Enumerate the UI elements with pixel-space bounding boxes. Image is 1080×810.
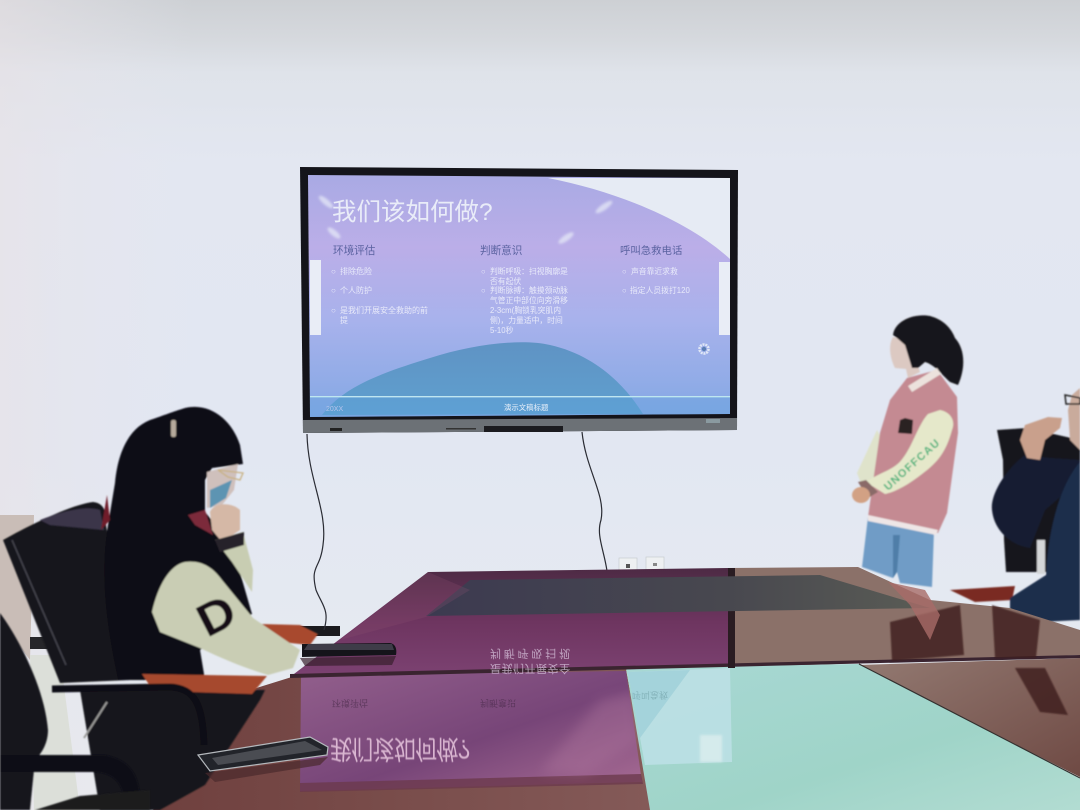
face <box>1068 388 1080 450</box>
wall sockets <box>619 557 664 571</box>
bullets column 3: 指定人员拨打120 <box>630 285 690 295</box>
side tabs of touch menu <box>310 260 730 335</box>
display control strip <box>330 419 720 432</box>
column heading 2: 判断意识 <box>480 244 522 257</box>
slide hill shape <box>322 342 643 415</box>
reflection on glass <box>628 668 732 765</box>
face <box>207 464 238 508</box>
bullets column 2: 5-10秒 <box>490 325 514 335</box>
high-back chair <box>3 502 130 683</box>
slide corner shape <box>548 178 730 259</box>
hair ponytail <box>893 315 963 385</box>
table far section purple <box>290 568 728 677</box>
slide footer date: 20XX <box>326 406 343 413</box>
wall-mounted display <box>300 167 738 433</box>
cream varsity sleeve <box>152 562 300 675</box>
bullets column 1: ○ <box>331 286 336 295</box>
jeans <box>862 517 934 587</box>
far screen reflection text <box>490 647 570 676</box>
cream sleeve <box>866 410 953 494</box>
bullets column 1: 提 <box>340 315 348 325</box>
red collar <box>188 510 213 535</box>
slide glare streaks <box>317 194 614 246</box>
bullets column 1: 排除危险 <box>340 266 372 276</box>
surgical mask <box>210 480 232 508</box>
icon: settings gear <box>700 344 708 354</box>
glass panel <box>626 664 1080 810</box>
raised hand <box>1020 417 1062 460</box>
column heading 3: 呼叫急救电话 <box>620 244 682 257</box>
seam at glass edge <box>859 664 1080 778</box>
bullets column 1: ○ <box>331 267 336 276</box>
armrest far <box>260 624 318 645</box>
face and neck <box>890 337 920 378</box>
far screen reflection text: 是我们开展安全 <box>490 662 570 676</box>
letter D patch: D <box>189 585 245 647</box>
near screen reflection subheads: 判断意识 <box>480 698 516 709</box>
display bezel <box>300 167 738 433</box>
near screen reflection subheads <box>332 690 668 709</box>
dark chair base <box>80 690 265 810</box>
purple screen reflection near <box>300 671 642 791</box>
slide title: 我们该如何做? <box>332 198 493 226</box>
sleeve lettering: UNOFFCAU <box>882 437 942 493</box>
rear forearm cuff and sleeve <box>215 532 253 592</box>
bullets column 2: 否有起伏 <box>490 276 521 286</box>
bullets column 3: ○ <box>622 267 627 276</box>
office chair <box>997 428 1080 572</box>
far screen reflection text: 判断呼吸扫视 <box>490 647 570 661</box>
pink jacket body <box>868 370 958 533</box>
display slide background <box>308 175 730 417</box>
near armrest <box>142 674 267 694</box>
near right wood panel <box>859 658 1080 777</box>
near left wood panel <box>153 669 652 810</box>
bear patch <box>898 418 913 434</box>
column heading 1: 环境评估 <box>333 244 376 257</box>
table far section wood <box>728 567 1080 668</box>
arm rest <box>950 586 1015 602</box>
bullets column 3 <box>622 266 690 295</box>
standing presenter <box>852 315 963 587</box>
cuff and hands <box>858 480 878 498</box>
bullets column 2: ○ <box>481 267 486 276</box>
reflection of people on table <box>890 605 1068 715</box>
bullets column 2: 侧)，力量适中，时间 <box>490 315 563 325</box>
chair lever <box>84 702 107 738</box>
bullets column 2 <box>481 266 568 335</box>
bullets column 2: 2-3cm(胸锁乳突肌内 <box>490 305 561 315</box>
bullets column 2: ○ <box>481 286 486 295</box>
navy jacket torso <box>1010 462 1080 622</box>
bullets column 3: 声音靠近求救 <box>631 266 678 276</box>
foreground empty chair <box>0 613 150 810</box>
desk mat <box>426 575 930 616</box>
bullets column 1: ○ <box>331 306 336 315</box>
highlight on purple far section <box>340 572 470 640</box>
near screen reflection title: 我们该如何做? <box>330 733 470 763</box>
glasses <box>218 470 243 480</box>
near screen reflection subheads: 呼叫急救 <box>632 690 668 701</box>
bullets column 2: 判断脉搏：触摸颈动脉 <box>490 285 568 295</box>
hair clip <box>171 420 176 437</box>
seated woman in foreground <box>3 407 318 810</box>
display bottom bar <box>303 418 737 433</box>
power cables <box>307 432 607 630</box>
bullets column 2: 气管正中部位向旁滑移 <box>490 295 568 305</box>
seated person on right <box>950 388 1080 622</box>
conference table <box>153 567 1080 810</box>
jacket collar <box>908 368 941 392</box>
slide footer strip <box>310 396 730 417</box>
glasses <box>1065 395 1080 404</box>
chair metal arm <box>52 687 204 745</box>
left wall panel and floor <box>0 515 340 810</box>
table seam <box>290 655 1080 678</box>
near screen reflection subheads: 环境评估 <box>332 698 368 709</box>
navy jacket arm <box>992 455 1080 548</box>
table centre joint <box>728 568 735 668</box>
bullets column 1: 个人防护 <box>340 285 372 295</box>
presenter legs reflection <box>888 582 940 640</box>
hand at chin <box>210 504 240 542</box>
phone on near table <box>198 737 328 782</box>
bullets column 1: 是我们开展安全救助的前 <box>340 305 428 315</box>
bullets column 2: 判断呼吸：扫视胸廓是 <box>490 266 568 276</box>
bullets column 1 <box>331 266 428 325</box>
back sleeve <box>857 430 888 486</box>
ponytail hair and dark jacket <box>104 407 252 680</box>
slide footer title: 演示文稿标题 <box>504 403 549 412</box>
bullets column 3: ○ <box>622 286 627 295</box>
phone on far table <box>300 643 396 666</box>
